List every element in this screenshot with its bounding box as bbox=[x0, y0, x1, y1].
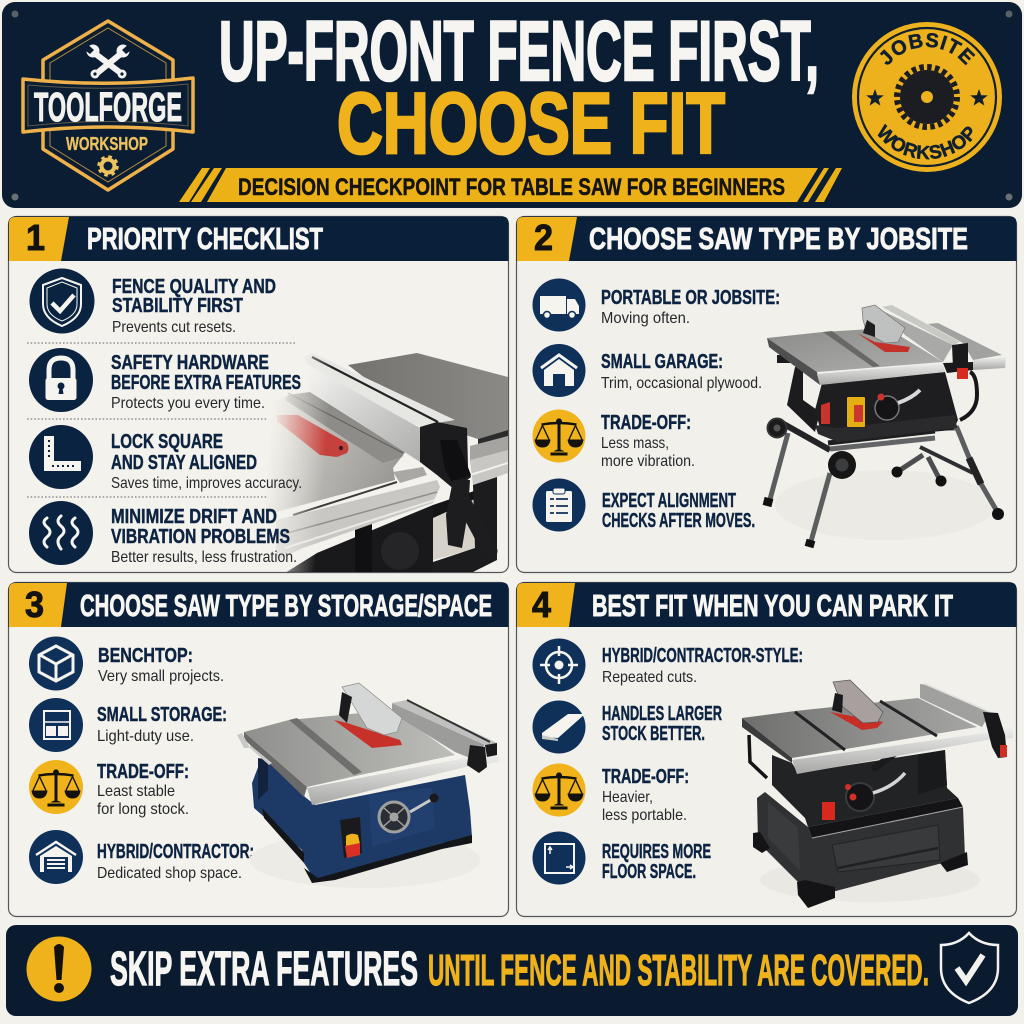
item: trade-off: TRADE-OFF: bbox=[602, 766, 689, 788]
title: CHOOSE FIT bbox=[337, 76, 725, 172]
item: requires floor space: FLOOR SPACE. bbox=[602, 861, 696, 883]
subtitle ribbon bbox=[179, 168, 842, 202]
icon: padlock bbox=[29, 348, 93, 412]
icon: exclamation bbox=[26, 936, 92, 1002]
item: expect alignment checks: CHECKS AFTER MOVES. bbox=[602, 510, 755, 532]
icon: stars bbox=[866, 89, 988, 106]
panel 2: saw type by jobsite bbox=[516, 216, 1016, 572]
item: handles larger stock: HANDLES LARGER bbox=[602, 703, 722, 725]
icon: balance scale bbox=[532, 764, 586, 816]
item: trade-off bbox=[29, 760, 189, 818]
rails bbox=[817, 363, 945, 385]
subtitle ribbon: DECISION CHECKPOINT FOR TABLE SAW FOR BEGINNERS bbox=[238, 174, 785, 201]
header: storage: CHOOSE SAW TYPE BY STORAGE/SPACE bbox=[80, 588, 492, 623]
item: handles larger stock bbox=[532, 700, 722, 754]
item: safety hardware: SAFETY HARDWARE bbox=[111, 352, 269, 374]
item: trade-off bbox=[532, 410, 695, 470]
logo: Toolforge Workshop: WORKSHOP bbox=[66, 134, 148, 154]
rail bbox=[792, 728, 1013, 774]
front legs bbox=[769, 428, 998, 545]
item: hybrid contractor style bbox=[532, 638, 803, 692]
item: hybrid contractor style: Repeated cuts. bbox=[602, 669, 697, 686]
footer callout bbox=[6, 925, 1018, 1016]
item: requires floor space bbox=[532, 832, 711, 884]
feet bbox=[753, 832, 770, 853]
item: hybrid contractor: Dedicated shop space. bbox=[97, 865, 242, 882]
image: blue benchtop table saw bbox=[237, 683, 499, 888]
image: jobsite table saw on folding stand bbox=[767, 305, 1006, 547]
item: fence quality: STABILITY FIRST bbox=[112, 295, 243, 317]
item: expect alignment checks bbox=[532, 478, 755, 532]
item: lock square: LOCK SQUARE bbox=[111, 431, 223, 453]
title bbox=[219, 4, 819, 172]
handwheel bbox=[379, 802, 409, 832]
icon: vibration waves bbox=[29, 501, 93, 565]
table top bbox=[742, 698, 977, 758]
item: minimize drift: VIBRATION PROBLEMS bbox=[111, 526, 290, 548]
item: requires floor space: REQUIRES MORE bbox=[602, 841, 711, 863]
icon: garage bbox=[29, 830, 83, 884]
item: hybrid contractor bbox=[29, 830, 254, 884]
item: hybrid contractor: HYBRID/CONTRACTOR: bbox=[97, 841, 254, 863]
icon: cabinet bbox=[29, 698, 83, 752]
icon: carpenter square bbox=[29, 425, 93, 489]
item: benchtop bbox=[29, 636, 224, 690]
item: benchtop: Very small projects. bbox=[98, 668, 224, 685]
icon: house bbox=[532, 344, 586, 397]
icon: lumber board bbox=[532, 700, 586, 754]
badge: Jobsite Workshop saw blade seal bbox=[852, 22, 1002, 172]
motor body bbox=[815, 372, 958, 440]
item: trade-off: Less mass, bbox=[601, 435, 669, 452]
item: safety hardware: Protects you every time. bbox=[111, 395, 265, 412]
item: fence quality: FENCE QUALITY AND bbox=[112, 276, 276, 298]
item: trade-off: Least stable bbox=[97, 783, 175, 800]
item: fence quality bbox=[30, 268, 276, 336]
item: small storage: SMALL STORAGE: bbox=[97, 704, 227, 726]
item: minimize drift: Better results, less frustration. bbox=[111, 549, 297, 566]
item: trade-off: TRADE-OFF: bbox=[97, 761, 189, 783]
switch bbox=[340, 817, 362, 858]
icon: gear bbox=[99, 157, 117, 175]
item: portable or jobsite: PORTABLE OR JOBSITE: bbox=[601, 287, 780, 309]
item: trade-off bbox=[532, 764, 689, 824]
header: priority checklist: 1 bbox=[26, 217, 45, 258]
icon: saw blade bbox=[897, 67, 957, 127]
icon: shield check bbox=[30, 268, 94, 334]
item: fence quality: Prevents cut resets. bbox=[112, 319, 236, 336]
icon: shield check bbox=[941, 933, 998, 1003]
header: storage: 3 bbox=[25, 584, 44, 625]
guard and red insert bbox=[857, 333, 910, 352]
item: trade-off: less portable. bbox=[602, 807, 687, 824]
item: expect alignment checks: EXPECT ALIGNMENT bbox=[602, 490, 736, 512]
extension and fence bbox=[928, 323, 1002, 360]
item: trade-off: for long stock. bbox=[97, 801, 189, 818]
item: trade-off: TRADE-OFF: bbox=[601, 412, 691, 434]
icon: clipboard checklist bbox=[532, 478, 586, 532]
panel 4: best fit when parked bbox=[516, 582, 1016, 916]
item: safety hardware bbox=[29, 348, 301, 412]
item: small garage: SMALL GARAGE: bbox=[601, 351, 723, 373]
footer callout: SKIP EXTRA FEATURES bbox=[110, 943, 418, 996]
header: priority checklist: PRIORITY CHECKLIST bbox=[87, 221, 323, 256]
item: handles larger stock: STOCK BETTER. bbox=[602, 723, 705, 745]
logo: Toolforge Workshop: TOOLFORGE bbox=[34, 84, 182, 130]
item: trade-off: more vibration. bbox=[601, 453, 695, 470]
item: lock square: Saves time, improves accuracy. bbox=[111, 475, 302, 492]
header: jobsite bbox=[516, 216, 1016, 261]
icon: crosshair target bbox=[532, 638, 586, 692]
back legs bbox=[897, 455, 940, 480]
image: table saw fence close-up bbox=[265, 353, 508, 573]
icon: delivery truck bbox=[532, 278, 586, 332]
icon: floor area square bbox=[532, 832, 586, 884]
red insert and guard bbox=[334, 720, 402, 748]
item: safety hardware: BEFORE EXTRA FEATURES bbox=[111, 372, 301, 394]
image: black contractor table saw on base bbox=[742, 680, 1013, 908]
header banner bbox=[2, 2, 1022, 208]
badge: Jobsite Workshop saw blade seal: WORKSHOP bbox=[878, 124, 972, 160]
left column bbox=[787, 367, 820, 432]
blue body bbox=[252, 757, 472, 880]
header: jobsite: 2 bbox=[534, 217, 553, 258]
fence bbox=[392, 703, 485, 758]
table top bbox=[244, 710, 455, 787]
fence head and red clamp bbox=[952, 343, 968, 368]
fence bbox=[920, 684, 990, 727]
item: lock square bbox=[29, 425, 302, 492]
panel 3: saw type by storage bbox=[8, 582, 508, 916]
icon: box bbox=[29, 636, 83, 690]
icon: balance scale bbox=[532, 410, 586, 462]
item: small storage: Light-duty use. bbox=[97, 728, 194, 745]
item: minimize drift bbox=[29, 501, 297, 566]
item: small garage bbox=[532, 344, 762, 397]
logo: Toolforge Workshop bbox=[23, 21, 193, 190]
header: park it: 4 bbox=[532, 584, 551, 625]
item: lock square: AND STAY ALIGNED bbox=[111, 452, 257, 474]
rail bbox=[307, 755, 499, 805]
red insert and guard bbox=[830, 712, 883, 730]
header: priority checklist bbox=[8, 216, 508, 261]
table top bbox=[767, 328, 943, 372]
header: storage bbox=[8, 582, 508, 627]
item: small garage: Trim, occasional plywood. bbox=[601, 375, 762, 392]
item: portable or jobsite: Moving often. bbox=[601, 310, 690, 327]
icon: balance scale bbox=[29, 760, 83, 814]
item: portable or jobsite bbox=[532, 278, 780, 332]
header: park it bbox=[516, 582, 1016, 627]
base cabinet bbox=[757, 792, 965, 902]
item: hybrid contractor style: HYBRID/CONTRACTOR-STYLE: bbox=[602, 645, 803, 667]
item: small storage bbox=[29, 698, 227, 752]
item: trade-off: Heavier, bbox=[602, 789, 653, 806]
item: minimize drift: MINIMIZE DRIFT AND bbox=[111, 506, 277, 528]
panel 1: priority checklist bbox=[8, 216, 508, 573]
motor body bbox=[772, 750, 958, 827]
item: benchtop: BENCHTOP: bbox=[98, 645, 193, 667]
icon: crossed wrenches bbox=[82, 42, 134, 78]
badge: Jobsite Workshop saw blade seal: JOBSITE bbox=[880, 33, 976, 66]
